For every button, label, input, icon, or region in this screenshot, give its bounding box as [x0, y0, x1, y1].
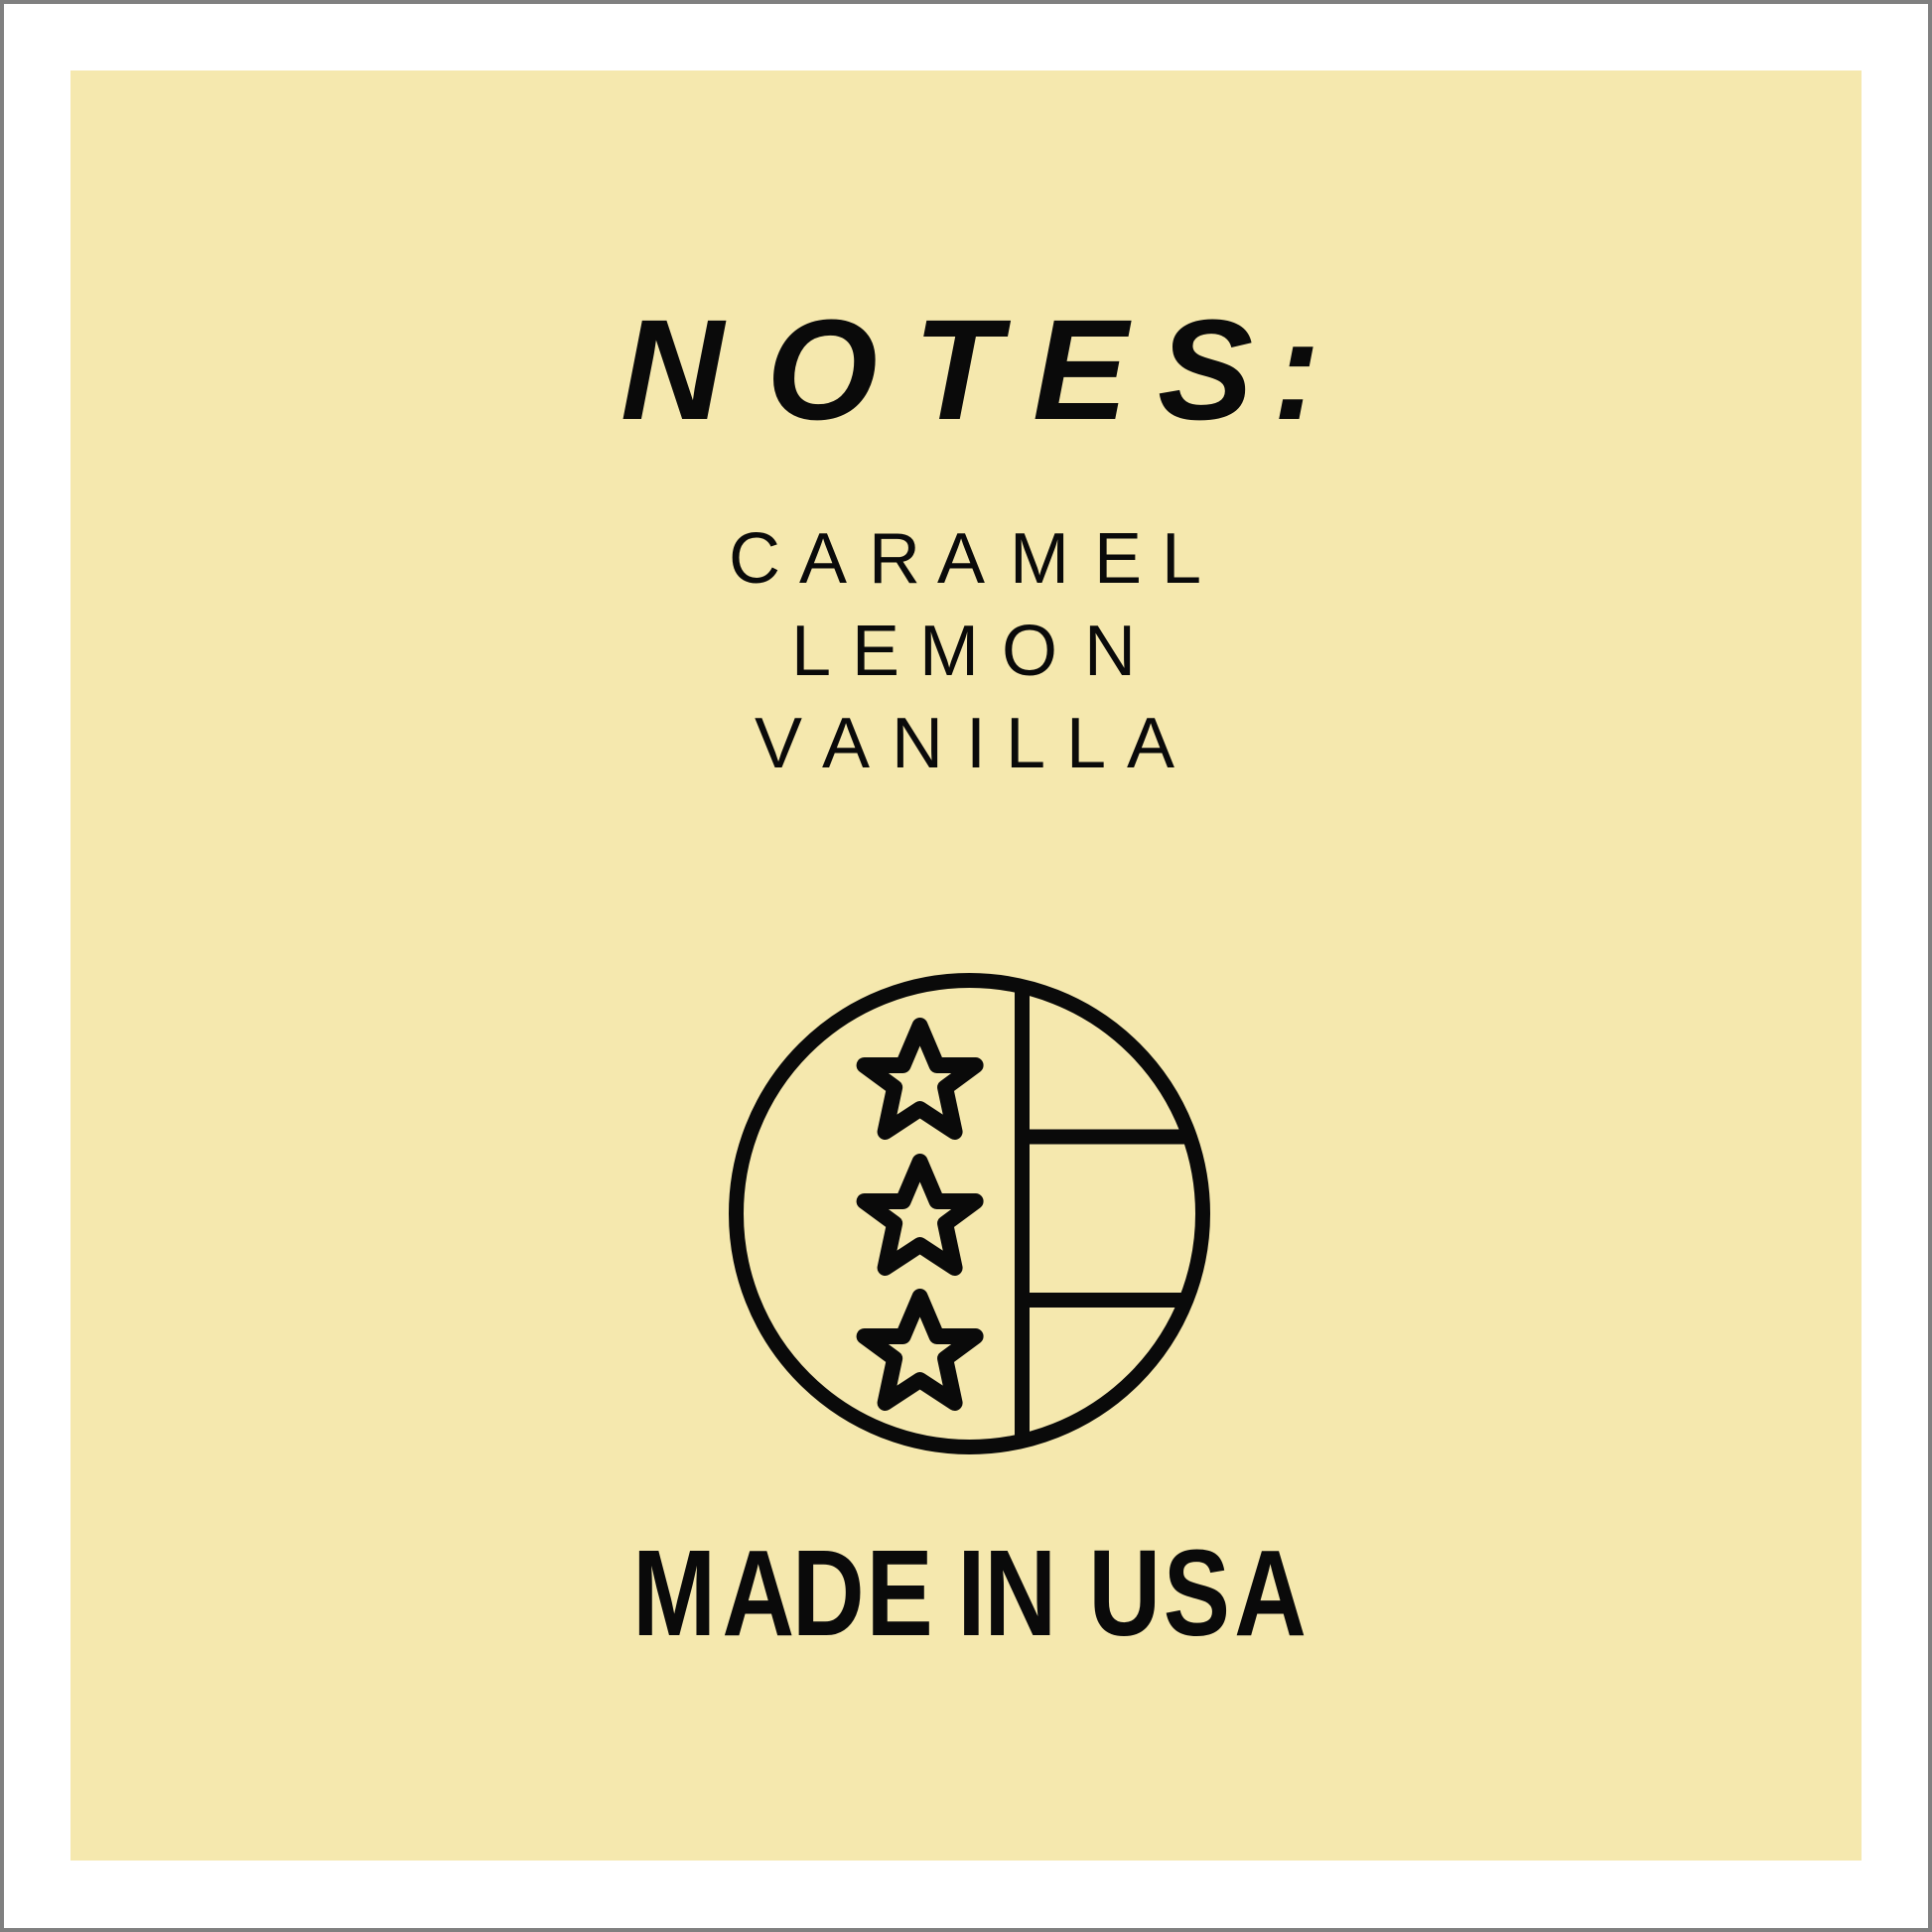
caption: made in usa: MADE IN USA	[632, 1524, 1307, 1661]
heading: notes: NOTES:	[621, 290, 1320, 450]
icon: stars	[865, 1026, 976, 1403]
note: vanilla: VANILLA	[755, 704, 1174, 783]
note: lemon: LEMON	[791, 612, 1136, 691]
note: caramel: CARAMEL	[729, 519, 1201, 599]
icon: american flag globe	[737, 981, 1203, 1448]
text block: flavor notes	[729, 519, 1201, 783]
